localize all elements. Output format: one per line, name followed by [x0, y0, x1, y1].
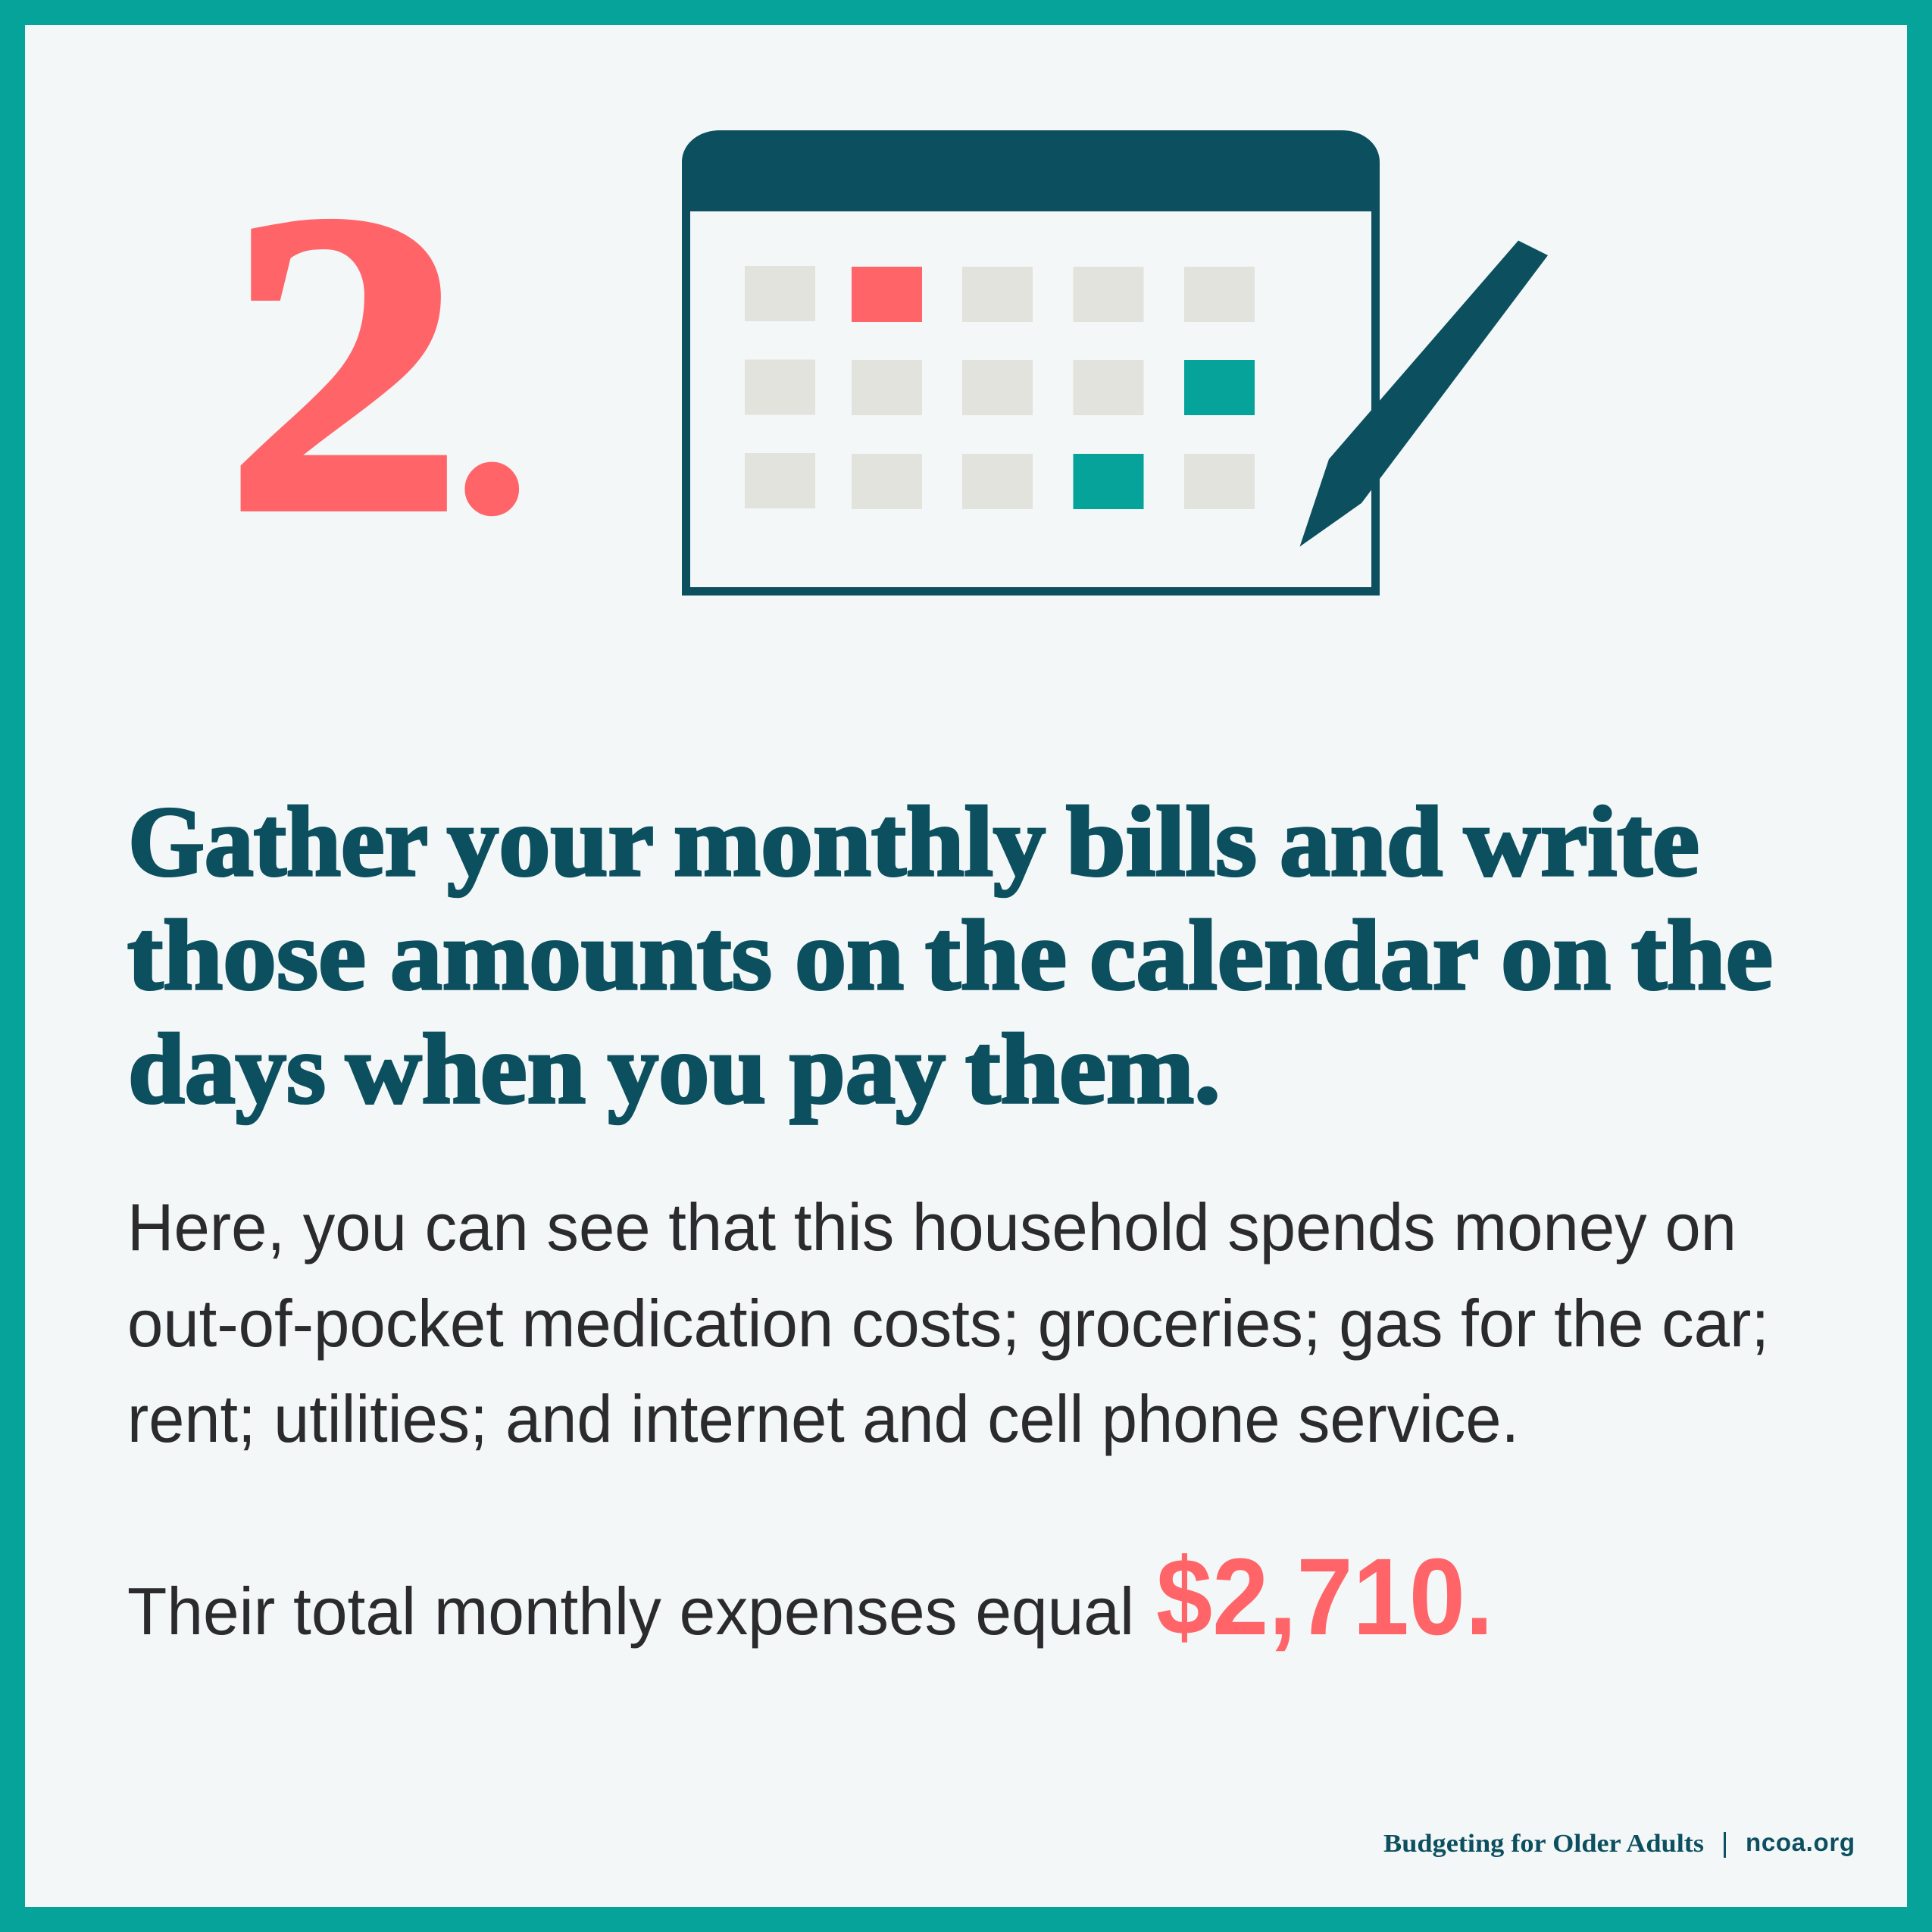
- calendar day cells: [745, 266, 1255, 509]
- body text: [127, 1190, 1769, 1456]
- heading: them.: [965, 1013, 1221, 1124]
- heading: Gather: [128, 786, 428, 897]
- total expenses line: Their total monthly expenses equal: [127, 1574, 1134, 1649]
- step number: [226, 127, 533, 600]
- heading: and: [1280, 786, 1443, 897]
- body text: Here, you can see that this household spends money on: [127, 1190, 1737, 1265]
- footer credit: ncoa.org: [1746, 1828, 1855, 1856]
- heading: on: [1501, 899, 1611, 1011]
- heading: amounts: [390, 899, 772, 1011]
- step number: .: [450, 213, 533, 584]
- icon: calendar: [682, 130, 1380, 596]
- heading: you: [608, 1013, 766, 1124]
- calendar header bar: [682, 130, 1380, 211]
- step number: 2: [226, 127, 462, 600]
- heading: the: [1631, 899, 1773, 1011]
- heading: those: [127, 899, 366, 1011]
- footer credit: Budgeting for Older Adults: [1383, 1830, 1704, 1858]
- heading: write: [1464, 786, 1699, 897]
- body text: rent; utilities; and internet and cell phone service.: [127, 1381, 1519, 1456]
- heading: the: [925, 899, 1067, 1011]
- heading: bills: [1066, 786, 1257, 897]
- highlighted day: teal row two: [1184, 360, 1255, 415]
- heading: monthly: [674, 786, 1046, 897]
- footer credit: [1383, 1828, 1855, 1858]
- total amount: $2,710.: [1156, 1536, 1493, 1658]
- heading: pay: [789, 1013, 946, 1124]
- highlighted day: coral: [852, 267, 922, 322]
- highlighted day: teal row three: [1073, 454, 1144, 509]
- heading: calendar: [1089, 899, 1479, 1011]
- heading: [127, 786, 1773, 1124]
- body text: out-of-pocket medication costs; groceries; gas for the car;: [127, 1286, 1769, 1361]
- heading: when: [345, 1013, 586, 1124]
- calendar outline: [682, 205, 1380, 596]
- icon: pen: [1300, 241, 1548, 547]
- heading: on: [795, 899, 904, 1011]
- heading: your: [447, 786, 654, 897]
- heading: days: [128, 1013, 326, 1124]
- total expenses line: [127, 1536, 1493, 1658]
